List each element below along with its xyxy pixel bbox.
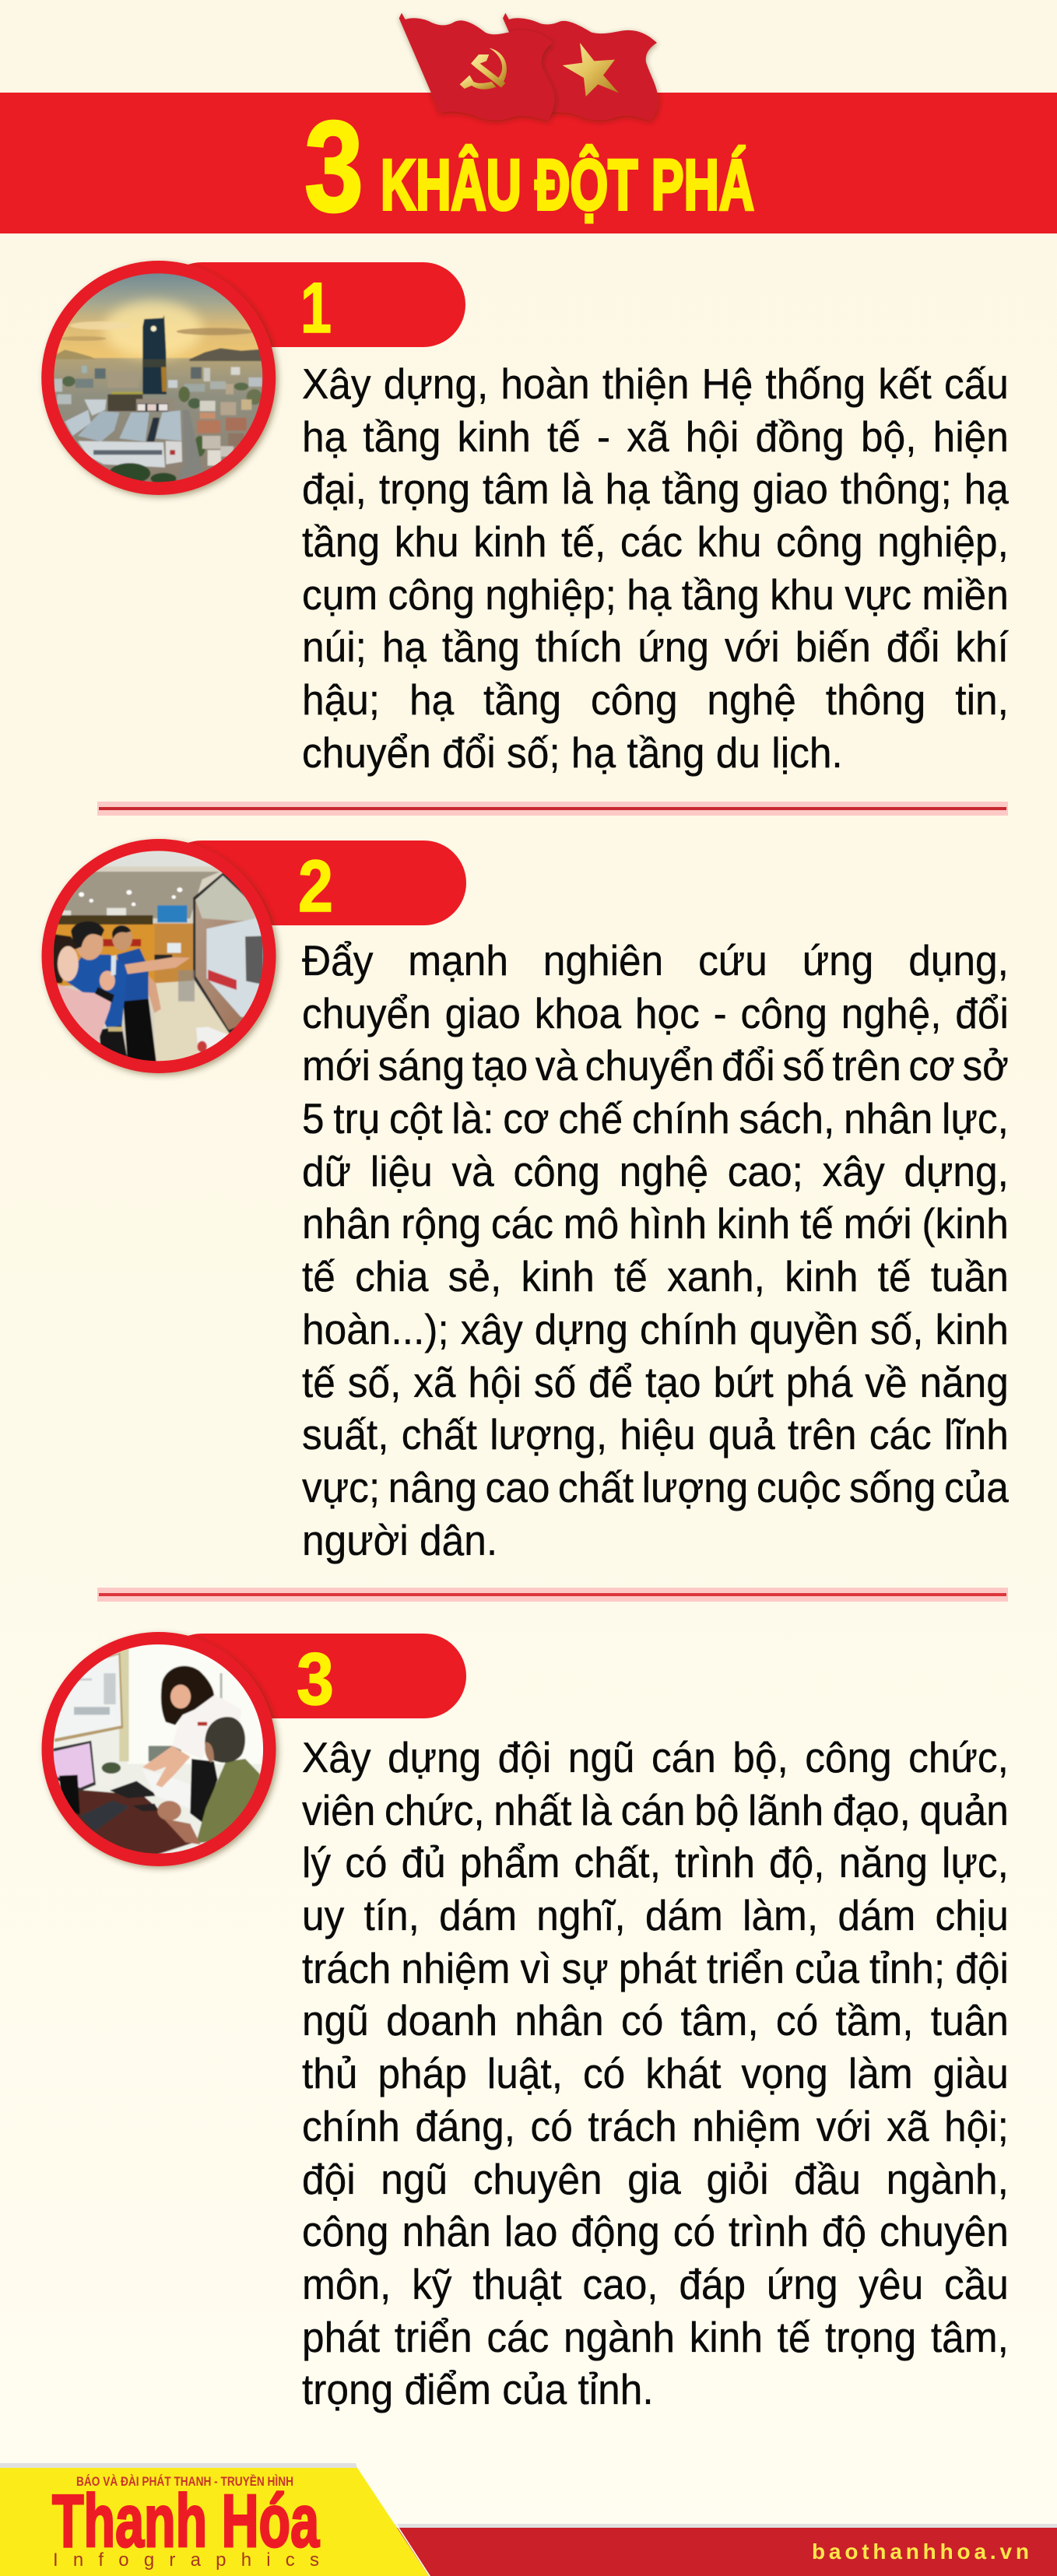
text block: breakthrough 2: chuyển giao khoa học - công nghệ, đổi (302, 989, 1009, 1037)
text block: breakthrough 1: chuyển đổi số; hạ tầng du lịch. (302, 728, 843, 777)
text block: breakthrough 3: chính đáng, có trách nhiệm với xã hội; (302, 2102, 1009, 2150)
badge and photo: city tower (40, 258, 465, 501)
text block: breakthrough 3: lý có đủ phẩm chất, trình độ, năng lực, (302, 1838, 1009, 1886)
footer website: baothanhhoa.vn (812, 2539, 1029, 2564)
footer (0, 2463, 1057, 2576)
title (304, 109, 755, 226)
text block: breakthrough 3: uy tín, dám nghĩ, dám làm, dám chịu (302, 1891, 1009, 1939)
text block: breakthrough 1: hạ tầng kinh tế - xã hội đồng bộ, hiện (302, 412, 1009, 461)
text block: breakthrough 1: hậu; hạ tầng công nghệ thông tin, (302, 676, 1009, 724)
text block: breakthrough 2: suất, chất lượng, hiệu quả trên các lĩnh (302, 1410, 1009, 1458)
text block: breakthrough 3: viên chức, nhất là cán bộ lãnh đạo, quản (302, 1786, 1009, 1834)
text block: breakthrough 2: hoàn...); xây dựng chính quyền số, kinh (302, 1305, 1009, 1353)
text block: breakthrough 2: 5 trụ cột là: cơ chế chính sách, nhân lực, (302, 1094, 1009, 1142)
text block: breakthrough 3: Xây dựng đội ngũ cán bộ, công chức, (302, 1733, 1009, 1781)
badge and photo: officials at digital screen (40, 837, 466, 1080)
text block: breakthrough 2: tế chia sẻ, kinh tế xanh, kinh tế tuần (302, 1252, 1009, 1300)
text block: breakthrough 3: thủ pháp luật, có khát vọng làm giàu (302, 2049, 1009, 2097)
text block: breakthrough 2: mới sáng tạo và chuyển đổi số trên cơ sở (302, 1041, 1009, 1090)
text block: breakthrough 3: công nhân lao động có trình độ chuyên (302, 2207, 1009, 2255)
text block: breakthrough 3 (302, 1733, 1009, 2413)
text block: breakthrough 2: vực; nâng cao chất lượng cuộc sống của (302, 1463, 1009, 1511)
text block: breakthrough 1: Xây dựng, hoàn thiện Hệ thống kết cấu (302, 360, 1009, 408)
text block: breakthrough 2: Đẩy mạnh nghiên cứu ứng dụng, (302, 936, 1009, 984)
text block: breakthrough 2: nhân rộng các mô hình kinh tế mới (kinh (302, 1199, 1009, 1248)
text block: breakthrough 2: tế số, xã hội số để tạo bứt phá về năng (302, 1357, 1009, 1406)
panel: breakthrough 1 (40, 258, 1009, 777)
text block: breakthrough 3: môn, kỹ thuật cao, đáp ứng yêu cầu (302, 2260, 1009, 2308)
text block: breakthrough 3: đội ngũ chuyên gia giỏi đầu ngành, (302, 2154, 1009, 2202)
footer logo text: Thanh Hóa (52, 2479, 319, 2563)
text block: breakthrough 2: dữ liệu và công nghệ cao; xây dựng, (302, 1147, 1009, 1195)
text block: breakthrough 1: cụm công nghiệp; hạ tầng khu vực miền (302, 570, 1009, 619)
text block: breakthrough 1: đại, trọng tâm là hạ tầng giao thông; hạ (302, 465, 1009, 513)
text block: breakthrough 3: trách nhiệm vì sự phát triển của tỉnh; đội (302, 1944, 1009, 1992)
text block: breakthrough 1: núi; hạ tầng thích ứng với biến đổi khí (302, 623, 1009, 671)
icon: party and national flags (397, 12, 662, 125)
badge and photo: city tower: 1 (300, 268, 332, 348)
text block: breakthrough 3: ngũ doanh nhân có tâm, có tầm, tuân (302, 1996, 1009, 2044)
text block: breakthrough 1: tầng khu kinh tế, các khu công nghiệp, (302, 518, 1009, 566)
text block: breakthrough 3: phát triển các ngành kinh tế trọng tâm, (302, 2313, 1009, 2361)
text block: breakthrough 2: người dân. (302, 1516, 497, 1564)
text block: breakthrough 2 (302, 936, 1009, 1564)
text block: breakthrough 1 (302, 360, 1009, 777)
panel: breakthrough 2 (40, 837, 1009, 1564)
badge and photo: office consultation: 3 (297, 1638, 334, 1721)
badge and photo: office consultation (40, 1630, 466, 1872)
badge and photo: officials at digital screen: 2 (298, 845, 333, 928)
footer logo text: BÁO VÀ ĐÀI PHÁT THANH - TRUYỀN HÌNH (76, 2474, 293, 2489)
footer logo text: Infographics (53, 2550, 319, 2571)
footer logo text (52, 2474, 319, 2571)
header band (0, 93, 1057, 233)
panel: breakthrough 3 (40, 1630, 1009, 2413)
text block: breakthrough 3: trọng điểm của tỉnh. (302, 2365, 654, 2413)
